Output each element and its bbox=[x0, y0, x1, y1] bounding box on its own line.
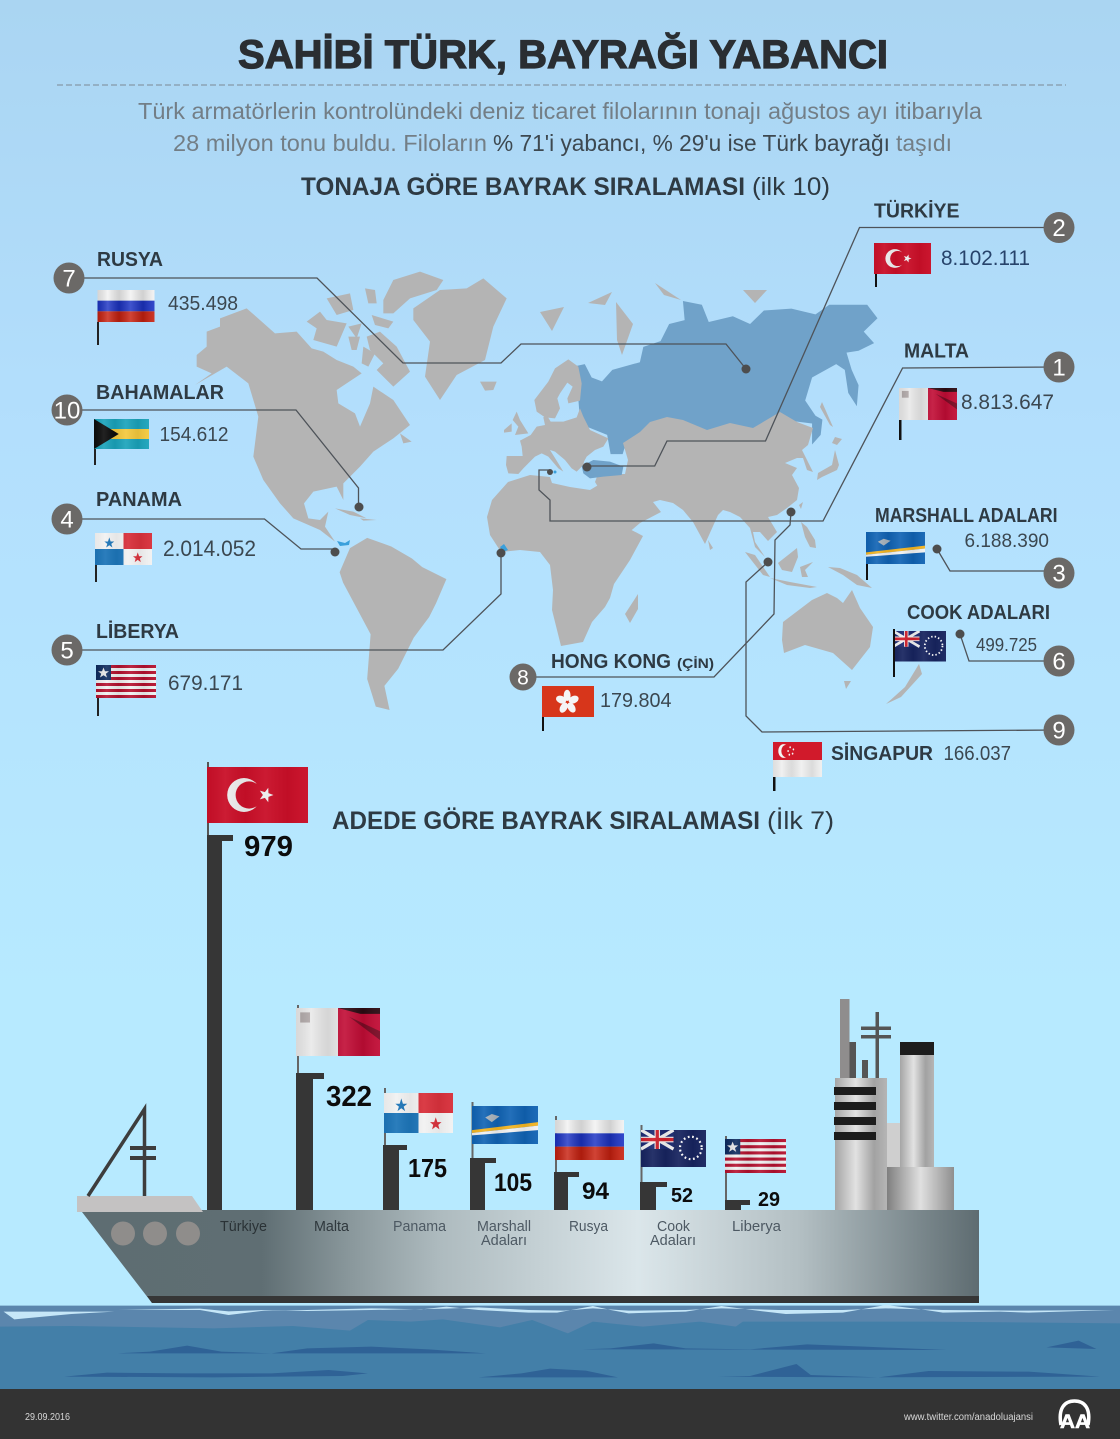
map location dots bbox=[330, 364, 964, 638]
entry: Hong Kong: 179.804 bbox=[600, 690, 672, 712]
sea bbox=[0, 1305, 1120, 1389]
bar: Panama 175: 175 bbox=[408, 1153, 447, 1183]
footer bbox=[0, 1389, 1120, 1439]
AA logo: AA bbox=[1060, 1412, 1090, 1433]
twitter url: www.twitter.com/anadoluajansi bbox=[903, 1412, 1033, 1423]
entry: Liberya: 679.171 bbox=[168, 672, 243, 695]
entry: Liberya: LİBERYA bbox=[96, 620, 179, 643]
entry: Bahamalar: 154.612 bbox=[160, 424, 228, 446]
entry: Panama: PANAMA bbox=[96, 489, 182, 511]
entry: Bahamalar bbox=[94, 382, 228, 465]
forecastle bbox=[77, 1196, 203, 1212]
bow mast bbox=[88, 1109, 156, 1196]
entry: Rusya bbox=[97, 249, 238, 345]
entry: Rusya: RUSYA bbox=[97, 249, 163, 271]
bar: Malta 322: Malta bbox=[314, 1218, 350, 1235]
entry: Rusya: 435.498 bbox=[168, 293, 238, 315]
entry: Türkiye: TÜRKİYE bbox=[874, 200, 960, 222]
rank badge 9 bbox=[1044, 714, 1074, 746]
entry: Hong Kong: (ÇİN) bbox=[677, 655, 714, 671]
intro text bbox=[138, 98, 982, 156]
bar: Cook Adaları 52: Adaları bbox=[650, 1232, 696, 1249]
date: 29.09.2016 bbox=[25, 1412, 70, 1423]
entry: Malta: 8.813.647 bbox=[961, 391, 1054, 414]
rank badge 8 bbox=[510, 664, 536, 690]
hull bbox=[82, 1210, 979, 1303]
heading: tonnage ranking: TONAJA GÖRE BAYRAK SIRALAMASI bbox=[301, 172, 745, 201]
north america and arctic bbox=[195, 272, 507, 542]
superstructure bbox=[834, 999, 954, 1210]
bar: Marshall Adaları 105: Marshall bbox=[477, 1218, 531, 1235]
bar: Marshall Adaları 105: Adaları bbox=[481, 1232, 527, 1249]
world map bbox=[195, 272, 922, 710]
rank badge 1 bbox=[1044, 352, 1074, 382]
intro text: 28 milyon tonu buldu. Filoların bbox=[173, 130, 487, 156]
bar: Rusya 94 bbox=[554, 1116, 624, 1235]
entry: Marshall Adaları: MARSHALL ADALARI bbox=[875, 505, 1058, 527]
rank badge 1: 1 bbox=[1052, 354, 1066, 382]
bar: Panama 175: Panama bbox=[393, 1218, 447, 1235]
bar: Türkiye 979 bbox=[207, 762, 308, 1235]
bar: Rusya 94: 94 bbox=[582, 1178, 610, 1205]
entry: Malta bbox=[899, 340, 1054, 440]
bar: Cook Adaları 52: Cook bbox=[657, 1218, 690, 1235]
rank badge 10: 10 bbox=[54, 398, 80, 424]
rank badge 2: 2 bbox=[1052, 215, 1066, 242]
rank badge 5: 5 bbox=[60, 638, 74, 664]
rank badge 6 bbox=[1044, 646, 1074, 676]
rank badge 5 bbox=[52, 634, 82, 666]
heading: tonnage ranking: (ilk 10) bbox=[752, 173, 830, 201]
africa, asia mainland and islands bbox=[487, 283, 922, 704]
rank badge 6: 6 bbox=[1052, 648, 1066, 676]
bar: Liberya 29 bbox=[725, 1136, 786, 1235]
bar: Rusya 94: Rusya bbox=[569, 1218, 609, 1235]
entry: Cook Adaları: 499.725 bbox=[976, 635, 1037, 655]
rank badge 7 bbox=[54, 262, 84, 294]
entry: Singapur: 166.037 bbox=[944, 743, 1011, 765]
rank badge 2 bbox=[1044, 212, 1074, 243]
title: SAHİBİ TÜRK, BAYRAĞI YABANCI bbox=[238, 31, 888, 77]
heading: count ranking: ADEDE GÖRE BAYRAK SIRALAMASI bbox=[332, 806, 760, 835]
entry: Marshall Adaları: 6.188.390 bbox=[964, 531, 1049, 552]
rank badge 4: 4 bbox=[60, 506, 74, 534]
entry: Malta: MALTA bbox=[904, 340, 969, 362]
portholes bbox=[111, 1222, 200, 1246]
bar: Cook Adaları 52: 52 bbox=[671, 1185, 693, 1207]
entry: Cook Adaları: COOK ADALARI bbox=[907, 602, 1050, 624]
bar: Malta 322: 322 bbox=[326, 1081, 372, 1113]
bar: Liberya 29: Liberya bbox=[732, 1218, 782, 1235]
rank badge 4 bbox=[52, 504, 82, 534]
intro text: Türk armatörlerin kontrolündeki deniz ticaret filolarının tonajı ağustos ayı itibarıyla bbox=[138, 98, 982, 124]
south america bbox=[340, 538, 446, 710]
europe and asia bbox=[504, 359, 608, 474]
ship bbox=[77, 999, 979, 1303]
entry: Panama: 2.014.052 bbox=[163, 536, 256, 561]
bar: Liberya 29: 29 bbox=[758, 1189, 780, 1211]
bar: Türkiye 979: Türkiye bbox=[220, 1218, 267, 1235]
entry: Hong Kong: HONG KONG bbox=[551, 651, 671, 673]
rank badge 9: 9 bbox=[1052, 718, 1066, 744]
bar: Marshall Adaları 105 bbox=[470, 1102, 538, 1249]
bar: Cook Adaları 52 bbox=[640, 1125, 706, 1249]
entry: Türkiye bbox=[874, 200, 1030, 287]
AA logo bbox=[1060, 1401, 1090, 1433]
small highlighted states bbox=[337, 470, 556, 552]
intro text: % 71'i yabancı, % 29'u ise Türk bayrağı bbox=[493, 130, 890, 156]
entry: Cook Adaları bbox=[893, 602, 1050, 677]
rank badge 8: 8 bbox=[517, 666, 529, 690]
entry: Hong Kong bbox=[542, 651, 714, 731]
entry: Bahamalar: BAHAMALAR bbox=[96, 382, 225, 404]
rank badge 3: 3 bbox=[1052, 560, 1066, 588]
intro text: taşıdı bbox=[896, 130, 952, 156]
entry: Türkiye: 8.102.111 bbox=[941, 247, 1030, 270]
entry: Liberya bbox=[96, 620, 243, 716]
bar: Türkiye 979: 979 bbox=[244, 831, 293, 863]
heading: count ranking: (İlk 7) bbox=[767, 806, 834, 835]
bar: Malta 322 bbox=[296, 1005, 380, 1235]
rank badge 3 bbox=[1044, 558, 1074, 588]
leader lines and markers bbox=[67, 228, 1059, 732]
entry: Singapur: SİNGAPUR bbox=[831, 742, 934, 765]
turkey highlighted bbox=[582, 460, 623, 478]
bar: Marshall Adaları 105: 105 bbox=[494, 1169, 532, 1197]
rank badge 7: 7 bbox=[62, 266, 76, 292]
entry: Panama bbox=[95, 489, 256, 582]
bar: Panama 175 bbox=[383, 1088, 453, 1235]
entry: Singapur bbox=[773, 742, 1011, 791]
russia highlighted bbox=[576, 301, 878, 454]
entry: Marshall Adaları bbox=[866, 505, 1058, 580]
